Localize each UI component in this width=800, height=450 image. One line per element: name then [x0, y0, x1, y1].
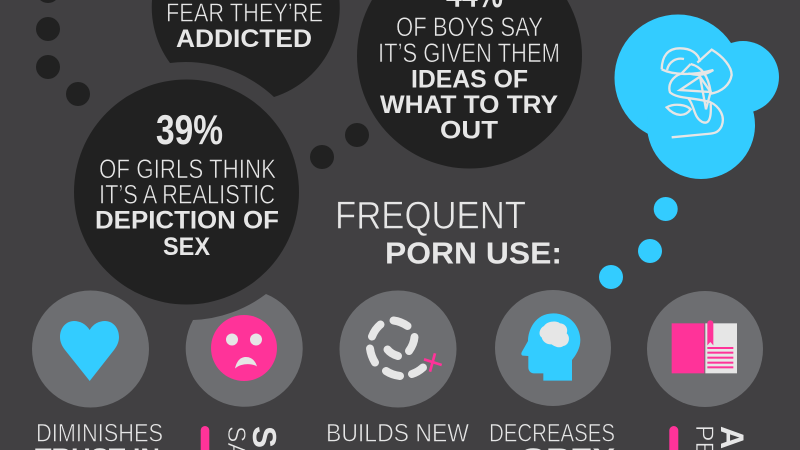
- caption: rotated text with pink bar: [669, 425, 750, 450]
- caption: sexual satisfaction (rotated): [201, 426, 283, 450]
- icon: heart on grey circle: [32, 290, 149, 408]
- icon: sad face on grey circle: [186, 294, 303, 407]
- speech bubble: 39% of girls: 39%: [156, 106, 223, 153]
- speech bubble: 39% of girls: DEPICTION OF: [95, 207, 279, 235]
- speech bubble: fear they're addicted: ADDICTED: [176, 25, 312, 53]
- dotted thought trail: centre: [310, 123, 369, 169]
- speech bubble: 39% of girls: OF GIRLS THINK: [99, 154, 276, 184]
- heading: frequent porn use: PORN USE:: [385, 235, 562, 270]
- speech bubble: 39% of girls: IT’S A REALISTIC: [99, 180, 275, 210]
- speech bubble: 44% of boys: OUT: [440, 117, 498, 145]
- dotted thought trail: left: [36, 0, 90, 106]
- icon: tangled scribble: [662, 48, 732, 137]
- speech bubble: 44% of boys: IT’S GIVEN THEM: [378, 38, 560, 68]
- icon: open book on grey circle: [647, 291, 763, 407]
- speech bubble: 44% of boys: IDEAS OF: [411, 66, 528, 94]
- speech bubble: 44% of boys: [357, 0, 582, 168]
- caption: diminishes trust in: DIMINISHES: [36, 420, 163, 447]
- heading: frequent porn use: FREQUENT: [335, 195, 526, 238]
- caption: decreases grey: DECREASES: [489, 420, 615, 447]
- caption: builds new: BUILDS NEW: [326, 420, 470, 447]
- icon: dashed neural pathway on grey circle: [340, 290, 456, 408]
- speech bubble: 39% of girls: [74, 80, 299, 304]
- speech bubble: 44% of boys: WHAT TO TRY: [380, 91, 558, 119]
- icon: head with brain on grey circle: [495, 290, 611, 406]
- speech bubble: 39% of girls: SEX: [163, 233, 210, 261]
- speech bubble: fear they're addicted: [152, 0, 340, 97]
- dotted thought trail: blue: [599, 197, 678, 289]
- speech bubble: 44% of boys: OF BOYS SAY: [396, 12, 543, 42]
- caption: rotated text with pink bar: A: [714, 426, 750, 449]
- heading: frequent porn use: [335, 195, 562, 270]
- thought cloud with tangled brain icon: [614, 14, 779, 179]
